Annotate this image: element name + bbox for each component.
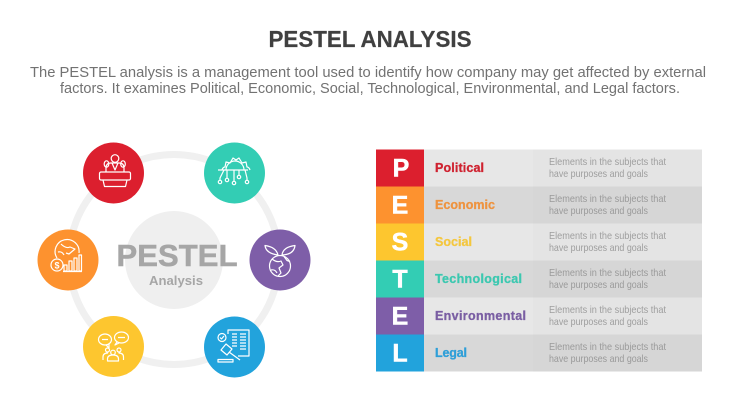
- row: Economic: [376, 186, 702, 224]
- row: Social: have purposes and goals: [549, 243, 648, 254]
- row: Political: P: [393, 154, 409, 182]
- icon: legal gavel and document: [204, 316, 265, 378]
- dollar sign: $: [54, 260, 60, 270]
- row: Social: Elements in the subjects that: [549, 231, 666, 242]
- center circle with label: [116, 211, 238, 309]
- row: Legal: [376, 334, 702, 372]
- icon: social people and speech bubbles: [83, 316, 144, 377]
- description text: factors. It examines Political, Economic, Social, Technological, Environmental, and Legal factors.: [60, 81, 680, 97]
- row: Legal: Legal: [435, 346, 467, 360]
- row: Economic: Economic: [435, 198, 495, 212]
- row: Technological: have purposes and goals: [549, 280, 648, 291]
- row: Political: Political: [435, 161, 484, 175]
- title: PESTEL ANALYSIS: [268, 26, 472, 52]
- row: Legal: have purposes and goals: [549, 354, 648, 365]
- row: Environmental: Environmental: [435, 309, 526, 323]
- icon: economic globe and chart: [38, 230, 98, 290]
- row: Legal: Elements in the subjects that: [549, 342, 666, 353]
- row: Legal: L: [392, 340, 408, 368]
- ring: [69, 154, 279, 364]
- icon: technological gear circuit: [204, 142, 265, 204]
- row: Economic: E: [392, 192, 408, 220]
- row: Environmental: [376, 298, 702, 334]
- description text: [30, 65, 706, 97]
- icon: environmental globe with leaves: [250, 230, 310, 290]
- row: Political: [376, 150, 702, 186]
- table: PESTEL factors: [376, 150, 702, 372]
- row: Social: Social: [435, 235, 472, 249]
- row: Environmental: E: [392, 302, 408, 330]
- row: Political: have purposes and goals: [549, 169, 648, 180]
- row: Environmental: have purposes and goals: [549, 317, 648, 328]
- row: Technological: T: [392, 266, 408, 294]
- row: Environmental: Elements in the subjects that: [549, 305, 666, 316]
- row: Social: [376, 224, 702, 260]
- row: Technological: [376, 260, 702, 298]
- row: Social: S: [392, 228, 408, 256]
- icon: political podium: [83, 142, 144, 204]
- row: Economic: have purposes and goals: [549, 206, 648, 217]
- row: Technological: Elements in the subjects that: [549, 268, 666, 279]
- row: Political: Elements in the subjects that: [549, 157, 666, 168]
- center circle with label: PESTEL: [116, 238, 238, 273]
- description text: The PESTEL analysis is a management tool used to identify how company may get affected by external: [30, 65, 706, 81]
- row: Economic: Elements in the subjects that: [549, 194, 666, 205]
- center circle with label: Analysis: [149, 273, 203, 288]
- row: Technological: Technological: [435, 272, 522, 286]
